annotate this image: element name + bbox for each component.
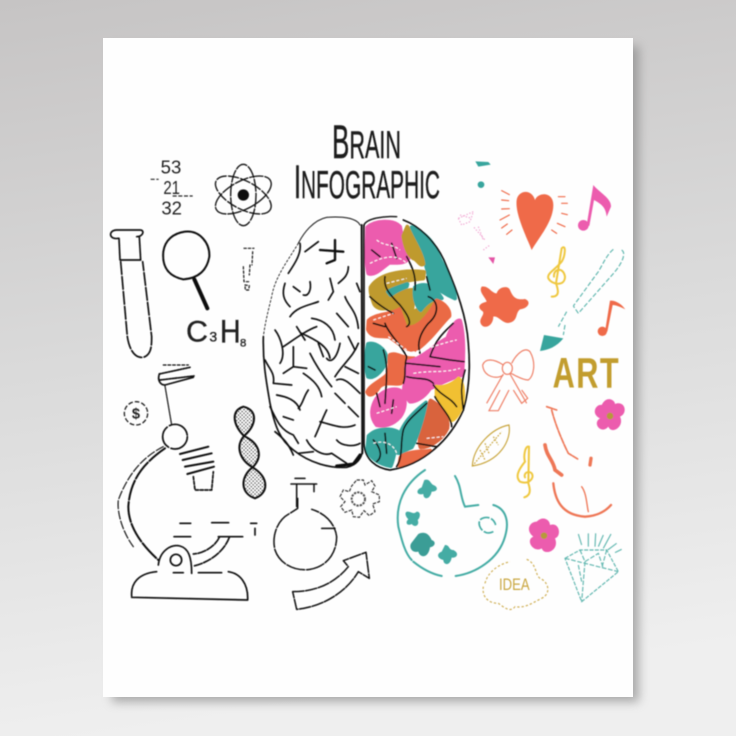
formula C3H8: C bbox=[186, 316, 208, 349]
teal paintbrush bbox=[540, 249, 624, 351]
orange heart with rays bbox=[500, 191, 567, 250]
teal palette bbox=[398, 470, 507, 576]
subtraction sum: 53 bbox=[161, 156, 181, 177]
yellow treble clef lower bbox=[518, 447, 533, 497]
diamond bbox=[565, 533, 622, 602]
artwork bbox=[111, 115, 625, 610]
pink paintbrush bbox=[458, 212, 495, 264]
art doodles upper bbox=[458, 161, 625, 403]
formula C3H8 bbox=[186, 314, 246, 350]
formula C3H8: H bbox=[220, 314, 241, 350]
white highlights on colour bbox=[370, 240, 460, 453]
subtraction sum: 32 bbox=[161, 198, 182, 219]
science doodles upper bbox=[111, 156, 277, 357]
title: BRAIN bbox=[332, 115, 401, 168]
right hemisphere outline and folds bbox=[364, 217, 469, 470]
brain bbox=[263, 217, 469, 470]
art doodles lower bbox=[398, 390, 625, 610]
left hemisphere folds bbox=[265, 240, 360, 466]
atom icon bbox=[210, 164, 277, 226]
pink music note bbox=[578, 185, 611, 231]
idea cloud: IDEA bbox=[499, 575, 530, 594]
flask bbox=[274, 478, 337, 570]
curved arrow bbox=[293, 552, 369, 609]
coin icon: $ bbox=[132, 406, 140, 422]
subtraction sum bbox=[151, 156, 193, 219]
gear icon bbox=[340, 480, 379, 517]
title: INFOGRAPHIC bbox=[294, 155, 440, 208]
orange violin bbox=[545, 407, 611, 517]
orange paint splat bbox=[479, 286, 529, 327]
formula C3H8: 3 bbox=[209, 328, 217, 344]
magnifying glass bbox=[163, 232, 209, 308]
teal exclamation bbox=[475, 161, 491, 188]
pink flower lower bbox=[529, 518, 559, 552]
poster sheet bbox=[103, 38, 633, 697]
microscope bbox=[118, 365, 257, 600]
ART lettering: ART bbox=[553, 348, 620, 397]
leaf bbox=[472, 425, 509, 466]
yellow treble clef bbox=[548, 247, 565, 297]
orange music note bbox=[598, 301, 625, 336]
right hemisphere colour fill bbox=[366, 222, 463, 466]
title bbox=[294, 115, 440, 208]
coin icon bbox=[124, 402, 148, 425]
science doodles lower bbox=[118, 365, 379, 609]
left hemisphere outline bbox=[263, 217, 363, 467]
formula C3H8: 8 bbox=[240, 338, 246, 350]
orange bow bbox=[483, 350, 534, 403]
poster shadow bbox=[112, 46, 639, 702]
bow tails bbox=[489, 390, 528, 411]
idea cloud bbox=[483, 559, 548, 610]
subtraction sum: 21 bbox=[163, 177, 180, 198]
exclamation doodle bbox=[243, 248, 254, 290]
DNA helix bbox=[235, 407, 265, 498]
test tube bbox=[111, 230, 152, 357]
pink flower top bbox=[595, 399, 625, 430]
